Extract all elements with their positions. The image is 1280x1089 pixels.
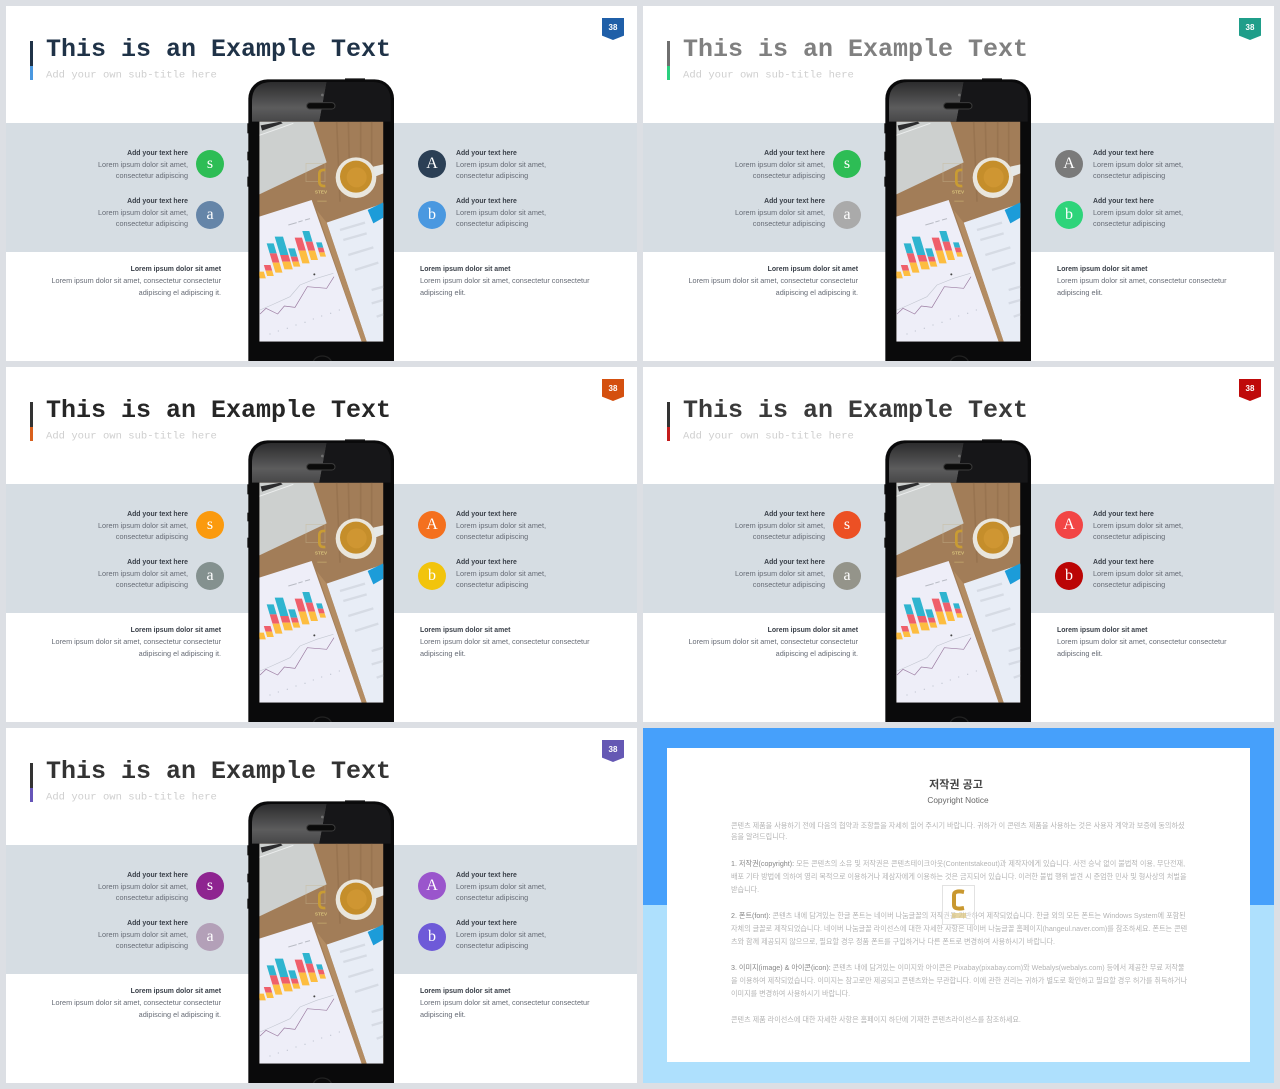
icon: s: s bbox=[844, 155, 850, 172]
text block: right 1: Lorem ipsum dolor sit amet, bbox=[456, 160, 546, 169]
title: This is an Example Text bbox=[683, 396, 1028, 425]
icon: A bbox=[1055, 511, 1083, 539]
subtitle: Add your own sub-title here bbox=[46, 430, 217, 442]
accent bar bbox=[30, 402, 33, 441]
text block: bottom right: Lorem ipsum dolor sit amet bbox=[1057, 266, 1147, 272]
text block: right 2 bbox=[456, 198, 546, 228]
text block: bottom left: Lorem ipsum dolor sit amet bbox=[131, 988, 221, 994]
text block: right 1: Add your text here bbox=[1093, 510, 1154, 518]
icon: b bbox=[1055, 562, 1083, 590]
text block: left 2: consectetur adipiscing bbox=[753, 580, 825, 589]
text block: bottom left: Lorem ipsum dolor sit amet, consectetur consectetur bbox=[688, 276, 858, 285]
icon: s: s bbox=[207, 155, 213, 172]
text block: bottom left: Lorem ipsum dolor sit amet, consectetur consectetur bbox=[51, 998, 221, 1007]
text block: right 2: Add your text here bbox=[456, 558, 517, 566]
text block: bottom left bbox=[51, 988, 221, 1018]
text block: left 2: consectetur adipiscing bbox=[116, 580, 188, 589]
phone mockup bbox=[247, 78, 394, 361]
page badge: 38 bbox=[609, 384, 617, 393]
phone mockup bbox=[247, 800, 394, 1083]
text block: left 2 bbox=[98, 558, 188, 589]
text block: bottom right: Lorem ipsum dolor sit amet, consectetur consectetur bbox=[1057, 276, 1227, 285]
text block: bottom left: Lorem ipsum dolor sit amet bbox=[131, 266, 221, 272]
icon: A bbox=[1055, 150, 1083, 178]
notice section 1 bbox=[731, 860, 1187, 894]
watermark logo bbox=[942, 885, 975, 925]
page badge: 38 bbox=[609, 745, 617, 754]
icon: s bbox=[833, 150, 861, 178]
panel: slide 2 bbox=[643, 6, 1274, 361]
icon: a: a bbox=[206, 567, 214, 584]
text block: right 2: Lorem ipsum dolor sit amet, bbox=[456, 569, 546, 578]
title: This is an Example Text bbox=[46, 35, 391, 64]
text block: left 1: Lorem ipsum dolor sit amet, bbox=[735, 521, 825, 530]
text block: left 2: Add your text here bbox=[127, 558, 188, 566]
icon: A bbox=[418, 872, 446, 900]
icon: A: A bbox=[426, 155, 438, 172]
notice section 1: 1. 저작권(copyright): 모든 콘텐츠의 소유 및 저작권은 콘텐츠테이크아웃(Contentstakeout)과 제작자에게 있습니다. 사전 승낙 없이 불법적 이용, 무단전재, bbox=[731, 860, 1185, 868]
phone mockup bbox=[247, 439, 394, 722]
text block: bottom left: Lorem ipsum dolor sit amet bbox=[131, 626, 221, 634]
subtitle: Add your own sub-title here bbox=[683, 430, 854, 442]
text block: left 2: Lorem ipsum dolor sit amet, bbox=[98, 930, 188, 939]
text block: right 2: Lorem ipsum dolor sit amet, bbox=[456, 930, 546, 939]
text block: right 1: Add your text here bbox=[456, 510, 517, 518]
accent bar bbox=[667, 41, 670, 80]
text block: left 1: Add your text here bbox=[764, 510, 825, 518]
text block: right 1: Add your text here bbox=[1093, 150, 1154, 156]
text block: left 1: Lorem ipsum dolor sit amet, bbox=[98, 521, 188, 530]
notice card bbox=[667, 748, 1250, 1062]
text block: left 1: Add your text here bbox=[127, 150, 188, 156]
notice section 2 bbox=[731, 912, 1187, 946]
text block: bottom right: adipiscing elit. bbox=[420, 288, 466, 296]
text block: left 1: Lorem ipsum dolor sit amet, bbox=[98, 160, 188, 169]
text block: right 2: consectetur adipiscing bbox=[1093, 580, 1165, 589]
text block: right 2: consectetur adipiscing bbox=[1093, 219, 1165, 228]
icon: a: a bbox=[843, 567, 851, 584]
text block: left 1: consectetur adipiscing bbox=[116, 893, 188, 902]
text block: bottom right bbox=[1057, 626, 1227, 658]
text block: bottom right: Lorem ipsum dolor sit amet, consectetur consectetur bbox=[420, 637, 590, 646]
text block: left 2: Add your text here bbox=[127, 920, 188, 926]
subtitle: Add your own sub-title here bbox=[46, 70, 217, 82]
text block: bottom right: Lorem ipsum dolor sit amet, consectetur consectetur bbox=[420, 276, 590, 285]
subtitle: Add your own sub-title here bbox=[46, 792, 217, 804]
text block: bottom left: adipiscing el adipiscing it. bbox=[776, 648, 858, 658]
phone mockup bbox=[884, 439, 1031, 722]
phone mockup bbox=[884, 78, 1031, 361]
text block: left 2: Add your text here bbox=[764, 558, 825, 566]
icon: a bbox=[833, 201, 861, 229]
text block: bottom left: Lorem ipsum dolor sit amet, consectetur consectetur bbox=[51, 637, 221, 646]
text block: bottom left: adipiscing el adipiscing it. bbox=[139, 1010, 221, 1018]
text block: bottom left bbox=[51, 626, 221, 658]
icon: s bbox=[833, 511, 861, 539]
icon: a bbox=[196, 562, 224, 590]
text block: bottom left bbox=[688, 266, 858, 296]
notice section 2: 자체의 글꼴로 제작되었습니다. 네이버 나눔글꼴 라이선스에 대한 자세한 사항은 네이버 나눔글꼴 홈페이지(hangeul.naver.com)를 참조하세요. 폰트는 콘텐 bbox=[731, 925, 1187, 933]
icon: a: a bbox=[206, 206, 214, 223]
text block: left 2 bbox=[735, 198, 825, 228]
text block: left 2: Add your text here bbox=[127, 198, 188, 204]
icon: A: A bbox=[426, 877, 438, 894]
icon: b: b bbox=[428, 928, 436, 945]
icon: b: b bbox=[1065, 567, 1073, 584]
text block: bottom right bbox=[420, 266, 590, 296]
text block: bottom right: adipiscing elit. bbox=[420, 648, 466, 658]
page badge bbox=[602, 379, 624, 401]
icon: a bbox=[196, 923, 224, 951]
text block: left 1: consectetur adipiscing bbox=[753, 532, 825, 541]
text block: right 2: Add your text here bbox=[1093, 198, 1154, 204]
text block: bottom right bbox=[420, 626, 590, 658]
text block: left 2: Lorem ipsum dolor sit amet, bbox=[98, 208, 188, 217]
text block: bottom right: Lorem ipsum dolor sit amet bbox=[420, 266, 510, 272]
title: This is an Example Text bbox=[683, 35, 1028, 64]
panel: slide 1 bbox=[6, 6, 637, 361]
icon: s: s bbox=[207, 516, 213, 533]
text block: right 2: consectetur adipiscing bbox=[456, 580, 528, 589]
text block: left 2: Lorem ipsum dolor sit amet, bbox=[98, 569, 188, 578]
text block: left 1 bbox=[98, 872, 188, 902]
icon: A: A bbox=[1063, 516, 1075, 533]
panel: slide 3 bbox=[6, 367, 637, 722]
text block: right 1 bbox=[456, 150, 546, 180]
accent bar bbox=[667, 402, 670, 441]
icon: a: a bbox=[843, 206, 851, 223]
icon: s bbox=[196, 511, 224, 539]
text block: bottom right: adipiscing elit. bbox=[1057, 648, 1103, 658]
icon: A bbox=[418, 150, 446, 178]
page badge: 38 bbox=[1246, 384, 1254, 393]
text block: bottom right bbox=[420, 988, 590, 1018]
text block: left 2: Lorem ipsum dolor sit amet, bbox=[735, 569, 825, 578]
text block: right 2: Lorem ipsum dolor sit amet, bbox=[456, 208, 546, 217]
icon: s: s bbox=[844, 516, 850, 533]
icon: b: b bbox=[1065, 206, 1073, 223]
text block: left 1: Add your text here bbox=[764, 150, 825, 156]
text block: bottom right: Lorem ipsum dolor sit amet bbox=[420, 626, 510, 634]
text block: left 1: consectetur adipiscing bbox=[116, 532, 188, 541]
notice intro: 콘텐츠 제품을 사용하기 전에 다음의 협약과 조항들을 자세히 읽어 주시기 바랍니다. 귀하가 이 콘텐츠 제품을 사용하는 것은 사용자 계약과 보증에 동의하셨 bbox=[731, 822, 1185, 830]
text block: bottom left bbox=[688, 626, 858, 658]
icon: a: a bbox=[206, 928, 214, 945]
notice section 1: 배포 기타 방법에 의하여 영리 목적으로 이용하거나 제삼자에게 이용하는 것은 금지되어 있습니다. 이러한 불법 행위 발견 시 준엄한 민사 및 형사상의 처벌을 bbox=[731, 873, 1187, 881]
icon: s: s bbox=[207, 877, 213, 894]
text block: bottom right: Lorem ipsum dolor sit amet, consectetur consectetur bbox=[420, 998, 590, 1007]
text block: right 1: Add your text here bbox=[456, 872, 517, 878]
text block: left 2: Add your text here bbox=[764, 198, 825, 204]
text block: right 1 bbox=[1093, 150, 1183, 180]
notice subheading: Copyright Notice bbox=[927, 795, 989, 805]
notice section 2: 2. 폰트(font): 콘텐츠 내에 담겨있는 한글 폰트는 네이버 나눔글꼴의 저작권을 기반하여 제작되었습니다. 한글 외의 모든 폰트는 Windows System에 포함된 bbox=[731, 912, 1186, 920]
text block: right 1: consectetur adipiscing bbox=[456, 893, 528, 902]
notice section 2: 츠와 함께 제공되지 않으므로, 필요할 경우 정품 폰트를 구입하거나 다른 폰트로 변경하여 사용하시기 바랍니다. bbox=[731, 938, 1055, 946]
text block: right 1: Lorem ipsum dolor sit amet, bbox=[1093, 521, 1183, 530]
notice section 3: 을 이용하여 제작되었습니다. 이미지는 참고로만 제공되고 콘텐츠와는 무관합니다. 이에 관한 권리는 귀하가 별도로 확인하고 필요할 경우 허가를 취득하거나 bbox=[731, 977, 1187, 985]
text block: right 1: consectetur adipiscing bbox=[456, 171, 528, 180]
text block: left 2: consectetur adipiscing bbox=[753, 219, 825, 228]
subtitle: Add your own sub-title here bbox=[683, 70, 854, 82]
text block: right 2: consectetur adipiscing bbox=[456, 941, 528, 950]
text block: left 2: consectetur adipiscing bbox=[116, 219, 188, 228]
panel: copyright notice bbox=[643, 728, 1274, 1083]
icon: a bbox=[833, 562, 861, 590]
text block: left 2 bbox=[735, 558, 825, 589]
text block: bottom right: Lorem ipsum dolor sit amet bbox=[420, 988, 510, 994]
page badge bbox=[602, 740, 624, 762]
text block: right 2 bbox=[456, 558, 546, 589]
text block: right 2: Add your text here bbox=[1093, 558, 1154, 566]
text block: bottom left: Lorem ipsum dolor sit amet bbox=[768, 266, 858, 272]
text block: right 2: Add your text here bbox=[456, 198, 517, 204]
text block: left 1 bbox=[735, 510, 825, 541]
text block: bottom right: adipiscing elit. bbox=[420, 1010, 466, 1018]
title: This is an Example Text bbox=[46, 396, 391, 425]
text block: right 2 bbox=[1093, 198, 1183, 228]
text block: right 1 bbox=[456, 510, 546, 541]
icon: b bbox=[418, 562, 446, 590]
text block: left 2: Lorem ipsum dolor sit amet, bbox=[735, 208, 825, 217]
notice section 3 bbox=[731, 964, 1187, 998]
icon: b: b bbox=[428, 206, 436, 223]
text block: left 1: Lorem ipsum dolor sit amet, bbox=[98, 882, 188, 891]
text block: right 2: Lorem ipsum dolor sit amet, bbox=[1093, 569, 1183, 578]
text block: right 2 bbox=[1093, 558, 1183, 589]
page badge: 38 bbox=[609, 23, 617, 32]
accent bar bbox=[30, 41, 33, 80]
notice intro bbox=[731, 822, 1185, 840]
text block: right 1 bbox=[456, 872, 546, 902]
text block: left 1 bbox=[735, 150, 825, 180]
text block: right 1: Lorem ipsum dolor sit amet, bbox=[1093, 160, 1183, 169]
icon: a bbox=[196, 201, 224, 229]
text block: bottom right: Lorem ipsum dolor sit amet bbox=[1057, 626, 1147, 634]
icon: A bbox=[418, 511, 446, 539]
icon: A: A bbox=[426, 516, 438, 533]
text block: right 1: consectetur adipiscing bbox=[1093, 171, 1165, 180]
icon: b: b bbox=[428, 567, 436, 584]
text block: right 1: Add your text here bbox=[456, 150, 517, 156]
icon: s bbox=[196, 150, 224, 178]
notice heading: 저작권 공고 bbox=[929, 779, 983, 791]
text block: right 1 bbox=[1093, 510, 1183, 541]
icon: b bbox=[418, 201, 446, 229]
text block: left 2 bbox=[98, 198, 188, 228]
text block: right 1: consectetur adipiscing bbox=[1093, 532, 1165, 541]
icon: A: A bbox=[1063, 155, 1075, 172]
text block: left 2 bbox=[98, 920, 188, 950]
text block: left 1: Add your text here bbox=[127, 872, 188, 878]
text block: left 1 bbox=[98, 150, 188, 180]
text block: left 1: Lorem ipsum dolor sit amet, bbox=[735, 160, 825, 169]
panel: slide 5 bbox=[6, 728, 637, 1083]
notice section 1: 받습니다. bbox=[731, 886, 759, 894]
text block: left 1: consectetur adipiscing bbox=[753, 171, 825, 180]
page badge bbox=[602, 18, 624, 40]
text block: bottom left: adipiscing el adipiscing it. bbox=[139, 648, 221, 658]
icon: b bbox=[1055, 201, 1083, 229]
icon: s bbox=[196, 872, 224, 900]
text block: right 2: Add your text here bbox=[456, 920, 517, 926]
text block: left 2: consectetur adipiscing bbox=[116, 941, 188, 950]
page badge bbox=[1239, 379, 1261, 401]
text block: bottom right: adipiscing elit. bbox=[1057, 288, 1103, 296]
text block: right 1: consectetur adipiscing bbox=[456, 532, 528, 541]
text block: bottom right bbox=[1057, 266, 1227, 296]
text block: bottom left: adipiscing el adipiscing it. bbox=[776, 288, 858, 296]
text block: bottom left: adipiscing el adipiscing it. bbox=[139, 288, 221, 296]
text block: bottom left bbox=[51, 266, 221, 296]
title: This is an Example Text bbox=[46, 757, 391, 786]
text block: left 1: consectetur adipiscing bbox=[116, 171, 188, 180]
text block: right 2: Lorem ipsum dolor sit amet, bbox=[1093, 208, 1183, 217]
text block: right 2: consectetur adipiscing bbox=[456, 219, 528, 228]
text block: right 1: Lorem ipsum dolor sit amet, bbox=[456, 882, 546, 891]
page badge: 38 bbox=[1246, 23, 1254, 32]
page badge bbox=[1239, 18, 1261, 40]
notice intro: 음을 알려드립니다. bbox=[731, 832, 787, 840]
text block: bottom right: Lorem ipsum dolor sit amet, consectetur consectetur bbox=[1057, 637, 1227, 646]
text block: bottom left: Lorem ipsum dolor sit amet, consectetur consectetur bbox=[51, 276, 221, 285]
text block: left 1: Add your text here bbox=[127, 510, 188, 518]
notice section 3: 이미지를 변경하여 사용하시기 바랍니다. bbox=[731, 990, 850, 998]
notice section 3: 3. 이미지(image) & 아이콘(icon): 콘텐츠 내에 담겨있는 이미지와 아이콘은 Pixabay(pixabay.com)와 Webalys(webalys.com) 등에서 제공한 무료 저작물 bbox=[731, 964, 1184, 972]
text block: left 1 bbox=[98, 510, 188, 541]
text block: bottom left: Lorem ipsum dolor sit amet bbox=[768, 626, 858, 634]
notice footer: 콘텐츠 제품 라이선스에 대한 자세한 사항은 홈페이지 하단에 기재한 콘텐츠라이선스를 참조하세요. bbox=[731, 1016, 1021, 1024]
panel: slide 4 bbox=[643, 367, 1274, 722]
accent bar bbox=[30, 763, 33, 802]
text block: right 1: Lorem ipsum dolor sit amet, bbox=[456, 521, 546, 530]
icon: b bbox=[418, 923, 446, 951]
text block: bottom left: Lorem ipsum dolor sit amet, consectetur consectetur bbox=[688, 637, 858, 646]
text block: right 2 bbox=[456, 920, 546, 950]
